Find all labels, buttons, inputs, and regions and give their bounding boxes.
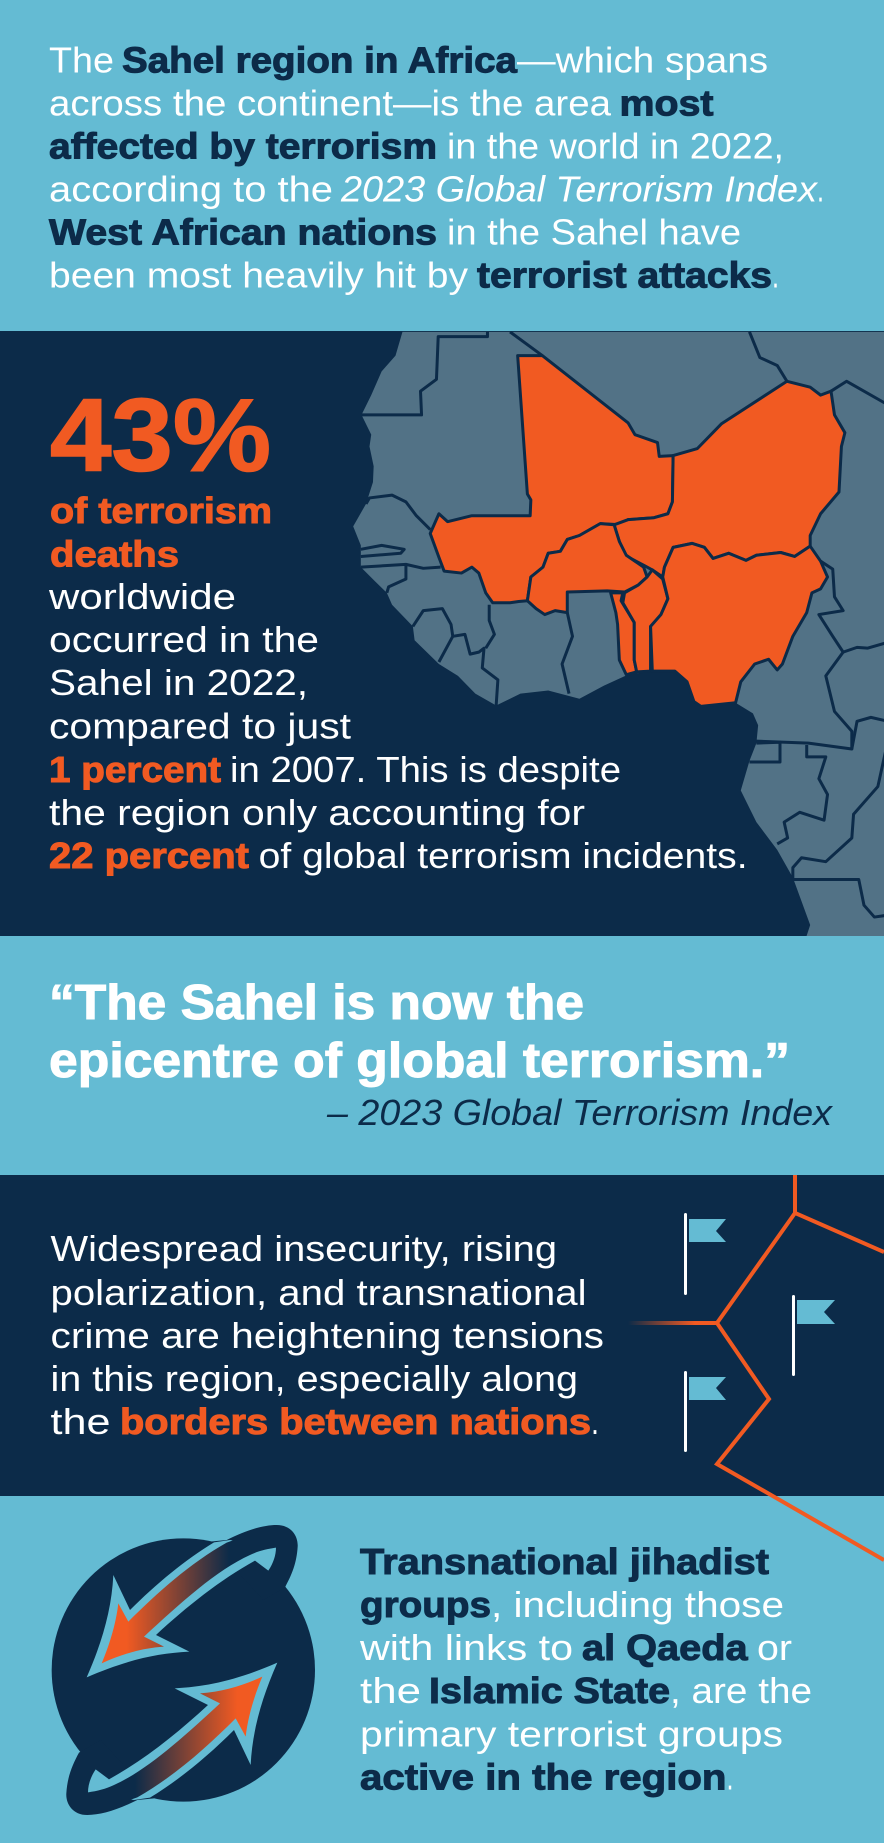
statistic description: compared to just xyxy=(49,706,351,746)
quote attribution: – 2023 Global Terrorism Index xyxy=(326,1092,834,1133)
groups text: al Qaeda xyxy=(582,1627,749,1668)
Niger xyxy=(614,381,845,577)
lower arrow xyxy=(66,1663,277,1815)
intro text: in the Sahel have xyxy=(447,212,741,252)
quote text: “The Sahel is now the xyxy=(49,976,584,1030)
intro text: most xyxy=(620,82,714,124)
groups text: , are the xyxy=(670,1670,812,1711)
statistic description: of global terrorism incidents. xyxy=(259,835,748,876)
borders text: Widespread insecurity, rising xyxy=(50,1228,557,1269)
groups text: Islamic State xyxy=(429,1670,670,1711)
groups text: groups xyxy=(360,1584,491,1625)
intro text: affected by terrorism xyxy=(49,126,437,166)
borders text: polarization, and transnational xyxy=(50,1272,586,1313)
Nigeria xyxy=(651,543,828,706)
quote text: epicentre of global terrorism.” xyxy=(49,1034,790,1088)
groups text xyxy=(359,1541,812,1798)
borders text: borders between nations xyxy=(120,1401,591,1442)
Benin xyxy=(623,570,668,672)
intro text: been most heavily hit by xyxy=(49,254,468,296)
intro text: according to the xyxy=(49,168,333,210)
panel: intro xyxy=(0,0,884,331)
intro text: terrorist attacks xyxy=(477,254,772,296)
statistic description: Sahel in 2022, xyxy=(49,662,308,703)
groups text: the xyxy=(360,1670,421,1711)
groups text: . xyxy=(726,1756,734,1798)
groups text: with links to xyxy=(359,1627,573,1668)
panel: borders xyxy=(0,1175,884,1496)
intro text: —which spans xyxy=(517,40,768,80)
intro text: Sahel region in Africa xyxy=(122,40,518,80)
Mali xyxy=(430,356,673,603)
intro text: in the world in 2022, xyxy=(447,126,784,166)
panel: jihadist groups xyxy=(0,1496,884,1843)
groups text: primary terrorist groups xyxy=(360,1714,783,1754)
statistic description: 1 percent xyxy=(49,749,221,790)
borders text: . xyxy=(591,1401,599,1442)
statistic description: the region only accounting for xyxy=(49,792,585,833)
intro text: across the continent—is the area xyxy=(49,82,612,124)
intro text: The xyxy=(49,40,114,80)
statistic description: of terrorism xyxy=(50,490,272,531)
intro text: West African nations xyxy=(49,212,437,252)
statistic description: deaths xyxy=(50,534,179,574)
flag 1 xyxy=(684,1213,726,1295)
border lines graphic xyxy=(628,1175,884,1560)
intro text: . xyxy=(772,254,779,296)
Togo xyxy=(611,593,637,675)
statistic: 43%: 43% xyxy=(50,378,271,492)
flag 2 xyxy=(792,1295,835,1376)
groups text: active in the region xyxy=(360,1756,726,1798)
Burkina Faso xyxy=(527,524,647,615)
intro text: 2023 Global Terrorism Index xyxy=(340,168,819,210)
upper arrow xyxy=(87,1525,298,1677)
quote text xyxy=(49,976,790,1088)
borders text xyxy=(50,1228,604,1442)
map of West Africa xyxy=(353,332,884,941)
borders text: the xyxy=(50,1401,110,1442)
statistic description xyxy=(48,490,748,876)
groups text: , including those xyxy=(491,1584,784,1625)
borders text: crime are heightening tensions xyxy=(50,1315,604,1356)
intro text: . xyxy=(817,168,824,210)
groups text: Transnational jihadist xyxy=(360,1541,769,1582)
flag 3 xyxy=(684,1371,726,1452)
statistic description: in 2007. This is despite xyxy=(230,749,621,790)
statistic description: worldwide xyxy=(48,576,236,617)
statistic description: occurred in the xyxy=(49,619,319,660)
intro text xyxy=(49,40,824,296)
borders text: in this region, especially along xyxy=(50,1358,578,1399)
panel: quote xyxy=(0,936,884,1175)
statistic description: 22 percent xyxy=(49,835,249,876)
panel: 43 percent with map xyxy=(0,331,884,941)
groups text: or xyxy=(757,1627,792,1668)
icon: globe with arrows xyxy=(52,1525,315,1815)
